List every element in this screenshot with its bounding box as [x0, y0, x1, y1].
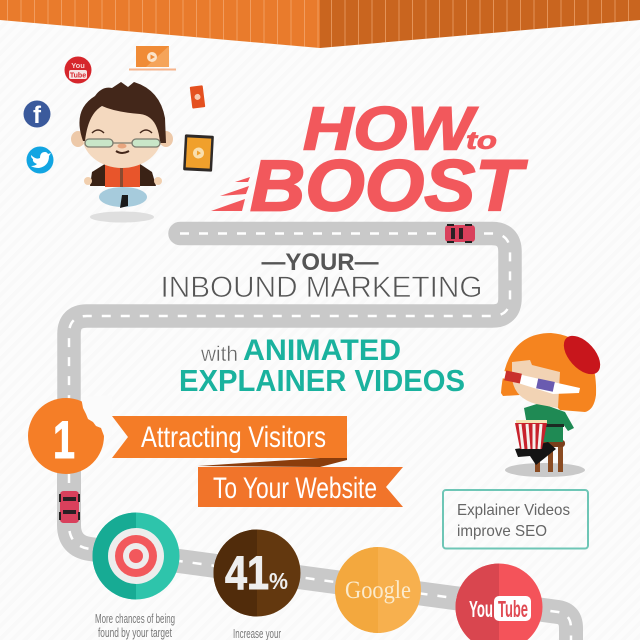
- icon: YouTube badge: Tube: [70, 72, 86, 80]
- heading: with animated explainer videos: ANIMATED: [243, 334, 401, 367]
- YouTube circle: Tube: [498, 596, 528, 622]
- caption: target: found by your target: [98, 626, 172, 640]
- icon: laptop: [129, 46, 176, 70]
- heading: with animated explainer videos: EXPLAINER VIDEOS: [179, 363, 465, 398]
- icon: YouTube badge: [64, 56, 92, 84]
- header banner: [0, 0, 640, 48]
- ribbon fold: [198, 458, 347, 467]
- icon: Twitter: [26, 146, 54, 174]
- title: to: [466, 127, 497, 155]
- target circle: [92, 512, 180, 600]
- road: upper section: [69, 234, 510, 400]
- Google circle: [335, 547, 421, 633]
- icon: Facebook: [24, 100, 50, 129]
- YouTube circle: [455, 564, 542, 640]
- caption: target: More chances of being: [95, 612, 175, 626]
- badge: number 1: 1: [53, 411, 75, 470]
- 41 percent circle: [213, 530, 300, 616]
- heading: with animated explainer videos: [179, 334, 465, 398]
- icon: Facebook: f: [33, 102, 42, 129]
- title: BOOST: [250, 146, 528, 226]
- heading: with animated explainer videos: with: [200, 343, 238, 366]
- ribbon: to your website: To Your Website: [213, 472, 377, 505]
- 41 percent circle: %: [269, 568, 288, 594]
- car: top road: [445, 224, 475, 243]
- callout: explainer videos improve SEO: [443, 490, 588, 548]
- callout: explainer videos improve SEO: improve SEO: [457, 523, 547, 540]
- 41 percent circle: 41: [225, 546, 269, 599]
- callout: explainer videos improve SEO: Explainer Videos: [457, 502, 570, 519]
- road: lower section: [69, 470, 571, 640]
- heading: your inbound marketing: [160, 249, 482, 304]
- car: left road: [59, 491, 80, 523]
- ribbon: to your website: [198, 467, 403, 507]
- title: [211, 94, 528, 226]
- ribbon: attracting visitors: Attracting Visitors: [141, 421, 326, 454]
- girl character: [501, 329, 607, 477]
- icon: tablet: [183, 134, 214, 172]
- caption: target: [95, 612, 175, 640]
- boy character: [71, 82, 173, 222]
- ribbon: attracting visitors: [112, 416, 347, 458]
- title: HOW: [303, 94, 478, 162]
- icon: phone: [190, 85, 205, 109]
- heading: your inbound marketing: INBOUND MARKETING: [160, 271, 482, 304]
- YouTube circle: You: [469, 596, 493, 622]
- heading: your inbound marketing: —YOUR—: [262, 249, 378, 276]
- icon: YouTube badge: You: [71, 61, 85, 70]
- badge: number 1: [28, 395, 112, 474]
- Google circle: Google: [345, 577, 411, 604]
